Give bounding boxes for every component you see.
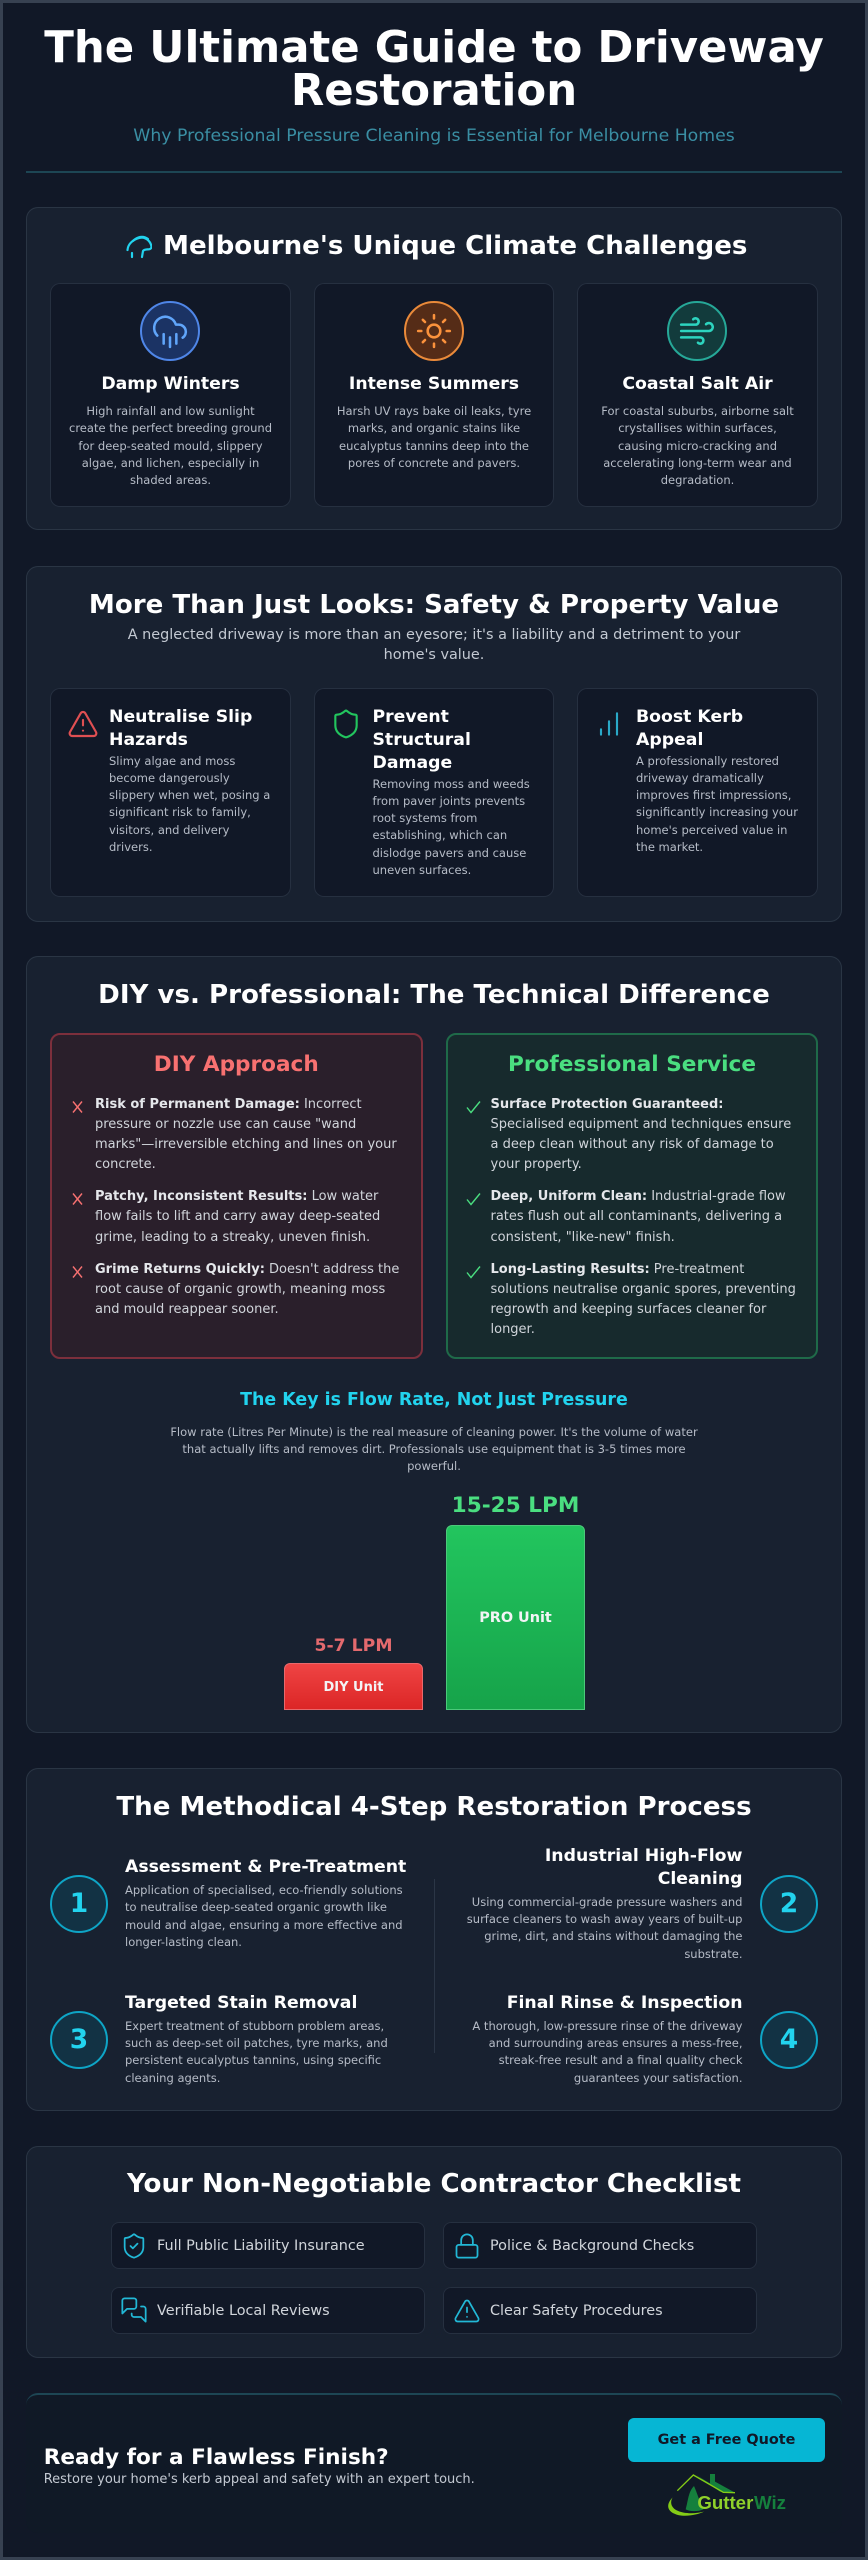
item text: Full Public Liability Insurance <box>157 2238 365 2254</box>
card: structural damage <box>314 688 554 897</box>
card title: Damage <box>372 753 452 773</box>
card title: Neutralise Slip <box>109 706 252 726</box>
point text <box>95 1096 397 1172</box>
step number: 3 <box>70 2024 88 2055</box>
bar text: DIY Unit <box>323 1680 384 1695</box>
step 4 <box>446 1988 818 2093</box>
card: kerb appeal <box>577 688 818 897</box>
step text: Expert treatment of stubborn problem areas, <box>125 2019 384 2033</box>
point text: Risk of Permanent Damage: Incorrect <box>95 1096 362 1112</box>
step 3 <box>50 1988 422 2093</box>
card text: root systems from <box>372 811 477 825</box>
point text: your property. <box>490 1157 582 1172</box>
title: Restoration <box>291 66 577 116</box>
step title <box>545 1844 742 1891</box>
icon: cloud and rain <box>126 236 152 258</box>
card text: accelerating long-term wear and <box>603 456 792 470</box>
step text: A thorough, low-pressure rinse of the driveway <box>472 2019 742 2033</box>
point text: and mould reappear sooner. <box>95 1302 279 1317</box>
panel: contractor checklist <box>26 2146 842 2358</box>
point text: concrete. <box>95 1157 156 1172</box>
flow rate text: Flow rate (Litres Per Minute) is the real measure of cleaning power. It's the volume of water <box>170 1424 698 1438</box>
title: The Ultimate Guide to Driveway <box>44 22 824 72</box>
point text: a deep clean without any risk of damage to <box>490 1137 774 1152</box>
card text: uneven surfaces. <box>372 863 471 877</box>
card text: marks, and organic stains like <box>348 421 520 435</box>
step title: Industrial High-Flow <box>545 1846 742 1866</box>
item text: Police & Background Checks <box>490 2238 694 2254</box>
bar text: PRO Unit <box>479 1610 552 1626</box>
icon: check <box>466 1101 480 1114</box>
heading: Your Non-Negotiable Contractor Checklist <box>127 2169 741 2199</box>
card text: Removing moss and weeds <box>372 776 530 790</box>
step text: such as deep-set oil patches, tyre marks, and <box>125 2036 388 2050</box>
point text: Long-Lasting Results: Pre-treatment <box>490 1262 744 1276</box>
icon: rain cloud <box>140 301 200 361</box>
step text <box>125 2018 388 2087</box>
step text: grime, dirt, and stains without damaging the <box>484 1929 742 1943</box>
point text <box>95 1189 380 1245</box>
card text: slippery when wet, posing a <box>109 788 270 802</box>
card: coastal salt air <box>577 283 818 507</box>
step text: mould and algae, ensuring a more effective and <box>125 1918 403 1932</box>
heading: The Methodical 4-Step Restoration Process <box>116 1792 752 1822</box>
step text: cleaning agents. <box>125 2071 220 2085</box>
comparison: DIY approach <box>50 1032 422 1359</box>
icon: cross <box>72 1266 82 1278</box>
point text <box>490 1262 796 1337</box>
point text: flow fails to lift and carry away deep-seated <box>95 1209 380 1224</box>
card title <box>109 706 252 750</box>
card title <box>372 706 471 773</box>
card text: significant risk to family, <box>109 805 251 819</box>
bar: DIY unit <box>284 1663 423 1710</box>
heading: More Than Just Looks: Safety & Property Value <box>89 590 779 620</box>
point text: regrowth and keeping surfaces cleaner for <box>490 1302 766 1317</box>
point text: marks"—irreversible etching and lines on your <box>95 1137 397 1152</box>
point text: rates flush out all contaminants, delivering a <box>490 1209 782 1224</box>
card text: A professionally restored <box>636 754 779 768</box>
point text <box>490 1189 786 1245</box>
card text: improves first impressions, <box>636 788 791 802</box>
card title: Appeal <box>636 730 703 750</box>
header <box>26 22 842 173</box>
card text: create the perfect breeding ground <box>69 421 272 435</box>
card text <box>69 404 272 487</box>
card text <box>636 754 798 854</box>
heading text: Melbourne's Unique Climate Challenges <box>163 231 747 261</box>
step text: persistent eucalyptus tannins, using specific <box>125 2053 381 2067</box>
step text: substrate. <box>684 1947 742 1961</box>
card title: Intense Summers <box>349 374 519 394</box>
step number: 1 <box>70 1888 88 1919</box>
panel: DIY vs professional <box>26 956 842 1733</box>
button: free quote <box>628 2418 825 2462</box>
subtitle: Why Professional Pressure Cleaning is Essential for Melbourne Homes <box>133 126 735 146</box>
card text: High rainfall and low sunlight <box>86 404 255 418</box>
checklist item: safety <box>443 2287 757 2334</box>
card title: Prevent <box>372 706 449 726</box>
step number <box>50 1875 108 1933</box>
card text <box>601 404 794 487</box>
card text: Slimy algae and moss <box>109 754 235 768</box>
icon: cross <box>72 1193 82 1205</box>
professional point 3 <box>466 1262 796 1337</box>
button: free quote: Get a Free Quote <box>658 2432 795 2448</box>
flow rate text <box>170 1424 698 1473</box>
point text: root cause of organic growth, meaning moss <box>95 1282 385 1297</box>
point text: pressure or nozzle use can cause "wand <box>95 1117 356 1132</box>
icon: rising bars <box>600 712 618 736</box>
card: intense summers <box>314 283 554 507</box>
heading: DIY vs. Professional: The Technical Difference <box>98 980 770 1010</box>
card text <box>337 404 531 470</box>
card text: significantly increasing your <box>636 805 798 819</box>
card text: algae, and lichen, especially in <box>82 456 259 470</box>
card text: for deep-seated mould, slippery <box>78 439 263 453</box>
card text: establishing, which can <box>372 828 507 842</box>
item text: Verifiable Local Reviews <box>157 2302 330 2318</box>
point text: Specialised equipment and techniques ensure <box>490 1117 791 1132</box>
card title: Damp Winters <box>101 374 240 394</box>
icon: shield check <box>120 2232 148 2260</box>
bar label: professional: 15-25 LPM <box>452 1493 579 1518</box>
card title: Coastal Salt Air <box>622 374 773 394</box>
card text: dislodge pavers and cause <box>372 846 526 860</box>
card text: Harsh UV rays bake oil leaks, tyre <box>337 404 531 418</box>
flow rate text: that actually lifts and removes dirt. Professionals use equipment that is 3-5 times more <box>182 1442 686 1456</box>
checklist item: reviews <box>111 2287 425 2334</box>
CTA heading: Ready for a Flawless Finish? <box>44 2445 389 2470</box>
card text: driveway dramatically <box>636 771 764 785</box>
CTA text: Restore your home's kerb appeal and safety with an expert touch. <box>44 2472 475 2487</box>
DIY heading: DIY Approach <box>154 1052 319 1076</box>
point text: Surface Protection Guaranteed: <box>490 1096 723 1112</box>
point text <box>490 1096 791 1172</box>
step text: Application of specialised, eco-friendly solutions <box>125 1883 403 1897</box>
step text: and surrounding areas ensures a mess-free, <box>489 2036 742 2050</box>
step number: 4 <box>780 2024 798 2055</box>
step number <box>50 2011 108 2069</box>
step text <box>472 2018 742 2087</box>
step title: Cleaning <box>658 1869 742 1889</box>
point text: Grime Returns Quickly: Doesn't address the <box>95 1262 399 1276</box>
step text <box>467 1894 742 1963</box>
checklist item: insurance <box>111 2222 425 2269</box>
intro text: A neglected driveway is more than an eyesore; it's a liability and a detriment to your <box>128 626 740 642</box>
DIY point 3 <box>72 1262 399 1317</box>
card text: drivers. <box>109 840 153 854</box>
point text: consistent, "like-new" finish. <box>490 1230 675 1245</box>
bar: PRO unit <box>446 1525 585 1710</box>
intro text: home's value. <box>384 647 484 663</box>
icon: cross <box>72 1101 82 1113</box>
step number <box>760 1875 818 1933</box>
point text: Patchy, Inconsistent Results: Low water <box>95 1189 378 1204</box>
step 2 <box>467 1846 818 1961</box>
panel: call to action <box>26 2393 842 2533</box>
card title: Structural <box>372 730 471 750</box>
item text: Clear Safety Procedures <box>490 2302 663 2318</box>
card: slip hazards <box>50 688 291 897</box>
icon: check <box>466 1266 480 1278</box>
card title <box>636 706 743 750</box>
panel: safety and property value <box>26 566 842 922</box>
intro text <box>128 626 740 663</box>
icon: warning triangle <box>453 2296 481 2324</box>
bar chart: flow rate <box>284 1493 585 1710</box>
logo: GutterWiz: Gutter <box>697 2492 753 2513</box>
card text: degradation. <box>661 473 734 487</box>
icon: check <box>466 1193 480 1206</box>
header divider <box>26 171 842 173</box>
step number <box>760 2011 818 2069</box>
icon: sun <box>404 301 464 361</box>
panel: 4-step process <box>26 1768 842 2111</box>
step text: to neutralise deep-seated organic growth like <box>125 1900 387 1914</box>
card title: Hazards <box>109 730 188 750</box>
point text <box>95 1262 399 1317</box>
step title: Final Rinse & Inspection <box>507 1993 742 2013</box>
flow rate text: powerful. <box>407 1459 461 1473</box>
comparison: professional service <box>446 1032 818 1359</box>
professional point 1 <box>466 1096 791 1172</box>
professional heading: Professional Service <box>508 1052 756 1076</box>
DIY point 1 <box>72 1096 397 1172</box>
icon: speech bubbles <box>120 2296 148 2324</box>
step text: streak-free result and a final quality check <box>499 2053 742 2067</box>
card text: become dangerously <box>109 771 230 785</box>
step text: surface cleaners to wash away years of built-up <box>467 1912 742 1926</box>
card text <box>372 776 530 877</box>
step text: guarantees your satisfaction. <box>574 2071 742 2085</box>
card: damp winters <box>50 283 291 507</box>
card title: Boost Kerb <box>636 706 743 726</box>
step number: 2 <box>780 1888 798 1919</box>
card text: home's perceived value in <box>636 823 787 837</box>
icon: lock <box>452 2232 480 2260</box>
flow rate heading: The Key is Flow Rate, Not Just Pressure <box>240 1390 628 1410</box>
step text: Using commercial-grade pressure washers and <box>472 1895 742 1909</box>
logo: GutterWiz <box>660 2470 790 2520</box>
heading: climate challenges <box>126 231 747 261</box>
card text: the market. <box>636 840 703 854</box>
checklist item: police checks <box>443 2222 757 2269</box>
card text: from paver joints prevents <box>372 794 525 808</box>
card text: shaded areas. <box>130 473 211 487</box>
title <box>44 22 824 116</box>
point text: grime, leading to a streaky, uneven finish. <box>95 1230 370 1245</box>
panel: climate challenges <box>26 207 842 530</box>
step text <box>125 1883 403 1949</box>
point text: solutions neutralise organic spores, preventing <box>490 1282 796 1297</box>
card text <box>109 754 270 854</box>
icon: wind <box>667 301 727 361</box>
card text: visitors, and delivery <box>109 823 229 837</box>
card text: For coastal suburbs, airborne salt <box>601 404 794 418</box>
card text: pores of concrete and pavers. <box>348 456 520 470</box>
step text: longer-lasting clean. <box>125 1935 242 1949</box>
step title: Targeted Stain Removal <box>125 1993 357 2013</box>
point text: Deep, Uniform Clean: Industrial-grade flow <box>490 1189 786 1204</box>
step 1 <box>50 1857 406 1949</box>
point text: longer. <box>490 1322 535 1337</box>
bar label: DIY: 5-7 LPM <box>314 1636 393 1656</box>
step title: Assessment & Pre-Treatment <box>125 1857 406 1877</box>
icon: warning triangle <box>68 710 98 738</box>
logo: GutterWiz: Wiz <box>754 2492 786 2513</box>
process divider <box>434 1879 435 2053</box>
card text: causing micro-cracking and <box>618 439 777 453</box>
card text: crystallises within surfaces, <box>618 421 777 435</box>
card text: eucalyptus tannins deep into the <box>339 439 529 453</box>
professional point 2 <box>466 1189 786 1245</box>
DIY point 2 <box>72 1189 380 1245</box>
icon: shield <box>334 710 358 738</box>
